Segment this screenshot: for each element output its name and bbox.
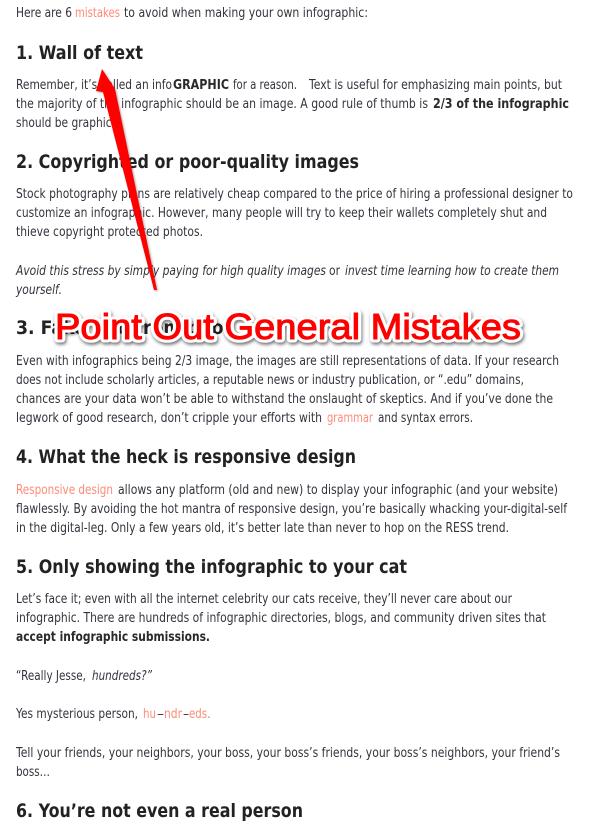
text block: advice (15, 264, 559, 298)
intro text: mistakes (75, 6, 120, 21)
text block: tell your friends (15, 746, 560, 780)
text block: advice: yourself. (15, 283, 62, 298)
text block: mistake 1: Remember, it’s called an info (16, 78, 172, 93)
heading: mistake 4: 4. What the heck is responsive design (16, 446, 356, 468)
text block: advice: invest time learning how to create them (345, 264, 559, 279)
text block: quote (16, 669, 152, 684)
heading: mistake 1: 1. Wall of text (16, 42, 143, 64)
title: overlay caption: Point Out General Mistakes (55, 306, 521, 347)
intro text (16, 6, 368, 21)
heading: mistake 2: 2. Copyrighted or poor-quality images (16, 151, 359, 173)
text block: mistake 1: for a reason. (233, 78, 297, 93)
text block: mistake 5: accept infographic submissions. (16, 630, 210, 645)
text block: reply: hu (143, 707, 156, 722)
text block: quote: “Really Jesse, (16, 669, 86, 684)
text block: mistake 1: 2/3 of the infographic (433, 97, 569, 112)
text block: mistake 1: the majority of the infographic should be an image. A good rule of thumb is (16, 97, 428, 112)
text block: mistake 1: GRAPHIC (173, 78, 229, 93)
text block: mistake 4: Responsive design (16, 483, 113, 498)
text block: mistake 3 (16, 354, 559, 426)
text block: mistake 1 (16, 78, 569, 131)
text block: tell your friends: boss… (16, 765, 50, 780)
title: overlay caption: Point Out General Mistakes (55, 306, 521, 347)
text block: mistake 3: grammar (327, 411, 373, 426)
text block: reply: ndr (164, 707, 183, 722)
text block: advice: or (329, 264, 341, 279)
text block: mistake 3: and syntax errors. (378, 411, 473, 426)
text block: mistake 2 (16, 187, 573, 240)
text block: mistake 4 (16, 483, 567, 536)
text block: mistake 4: in the digital-leg. Only a few years old, it’s better late than never to hop on the RESS trend. (16, 521, 509, 536)
text block: mistake 2: thieve copyright protected photos. (16, 225, 203, 240)
text block: quote: hundreds?” (92, 669, 152, 684)
text block: reply: eds (189, 707, 207, 722)
text block: reply: Yes mysterious person, (15, 707, 138, 722)
text block: advice: Avoid this stress by simply paying for high quality images (15, 264, 326, 279)
text block: reply: – (183, 707, 189, 722)
infographic page: . (208, 707, 210, 722)
text block: mistake 5 (16, 592, 546, 645)
heading: mistake 5: 5. Only showing the infographic to your cat (16, 556, 407, 578)
heading: mistake 6: 6. You’re not even a real person (16, 800, 303, 822)
intro text: Here are 6 (16, 6, 72, 21)
heading: mistake 3: 3. Fake info from poor (16, 317, 233, 339)
intro text: to avoid when making your own infographic: (124, 6, 368, 21)
text block: mistake 3: legwork of good research, don’t cripple your efforts with (16, 411, 322, 426)
text block: reply: – (157, 707, 164, 722)
arrow: red pointer to heading (96, 69, 157, 290)
text block: mistake 1: should be graphic. (16, 116, 115, 131)
